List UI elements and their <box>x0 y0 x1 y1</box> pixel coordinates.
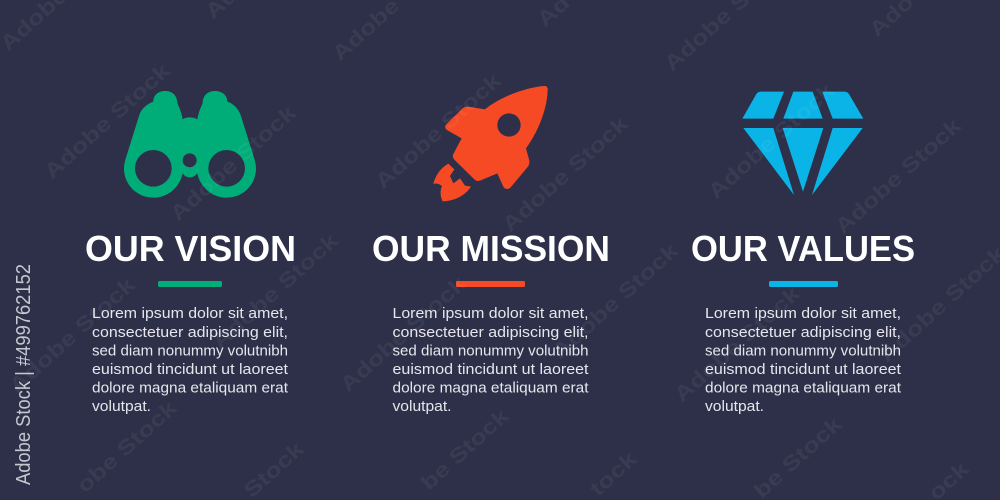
text block: mission description <box>392 305 589 415</box>
watermark pattern: Adobe Stock <box>208 228 343 354</box>
accent bar: blue <box>769 281 838 287</box>
watermark pattern: Adobe Stock <box>548 238 683 364</box>
text block: mission description: volutpat. <box>392 398 452 415</box>
accent bar: red <box>456 281 525 287</box>
panel: our values <box>691 92 915 415</box>
text block: mission description: dolore magna etaliquam erat <box>392 380 589 396</box>
heading: our values: OUR VALUES <box>691 228 915 269</box>
watermark pattern: Adobe Stock <box>40 58 175 184</box>
watermark pattern: Adobe Stock <box>5 272 140 398</box>
text block: vision description: consectetuer adipiscing elit, <box>92 324 288 341</box>
rocket body <box>445 86 548 189</box>
icon: diamond <box>742 92 863 195</box>
watermark pattern: Adobe Stock <box>166 100 301 226</box>
heading: our mission: OUR MISSION <box>372 228 610 269</box>
text block: values description: euismod tincidunt ut laoreet <box>705 361 902 378</box>
panel: our mission <box>372 86 610 415</box>
heading: our vision: OUR VISION <box>85 228 296 269</box>
text block: vision description: sed diam nonummy volutnibh <box>92 342 288 360</box>
text block: vision description: dolore magna etaliquam erat <box>92 380 289 396</box>
text block: vision description: euismod tincidunt ut laoreet <box>92 361 289 378</box>
watermark pattern: Adobe Stock <box>371 68 506 194</box>
watermark pattern: tock <box>585 447 642 500</box>
watermark pattern: Adobe Stock <box>336 271 471 397</box>
text block: values description <box>705 305 902 415</box>
watermark pattern: Adobe Stock <box>498 111 633 237</box>
text block: mission description: consectetuer adipiscing elit, <box>392 324 588 341</box>
text block: vision description: Lorem ipsum dolor sit amet, <box>92 305 288 322</box>
watermark pattern: Adobe Stock <box>831 113 966 239</box>
rocket flame <box>433 164 471 201</box>
text block: mission description: Lorem ipsum dolor sit amet, <box>392 305 588 322</box>
text block: values description: Lorem ipsum dolor sit amet, <box>705 305 901 322</box>
text block: values description: volutpat. <box>705 398 764 415</box>
accent bar: green <box>158 281 222 287</box>
watermark pattern: be Stock <box>416 404 514 495</box>
text block: vision description <box>92 305 289 415</box>
text block: values description: dolore magna etaliquam erat <box>705 380 902 396</box>
text block: vision description: volutpat. <box>92 398 151 415</box>
watermark pattern: obe Stock <box>72 396 182 498</box>
watermark pattern: Adobe Stock <box>704 78 839 204</box>
icon: binoculars <box>124 91 256 198</box>
text block: values description: consectetuer adipiscing elit, <box>705 324 901 341</box>
text block: mission description: sed diam nonummy volutnibh <box>392 342 588 360</box>
text block: values description: sed diam nonummy volutnibh <box>705 342 901 360</box>
text block: mission description: euismod tincidunt ut laoreet <box>392 361 589 378</box>
watermark pattern: Adobe Stock <box>670 281 805 407</box>
icon: rocket <box>433 86 548 201</box>
panel: our vision <box>85 91 296 415</box>
watermark id text: Adobe Stock | #499762152 <box>13 264 35 485</box>
